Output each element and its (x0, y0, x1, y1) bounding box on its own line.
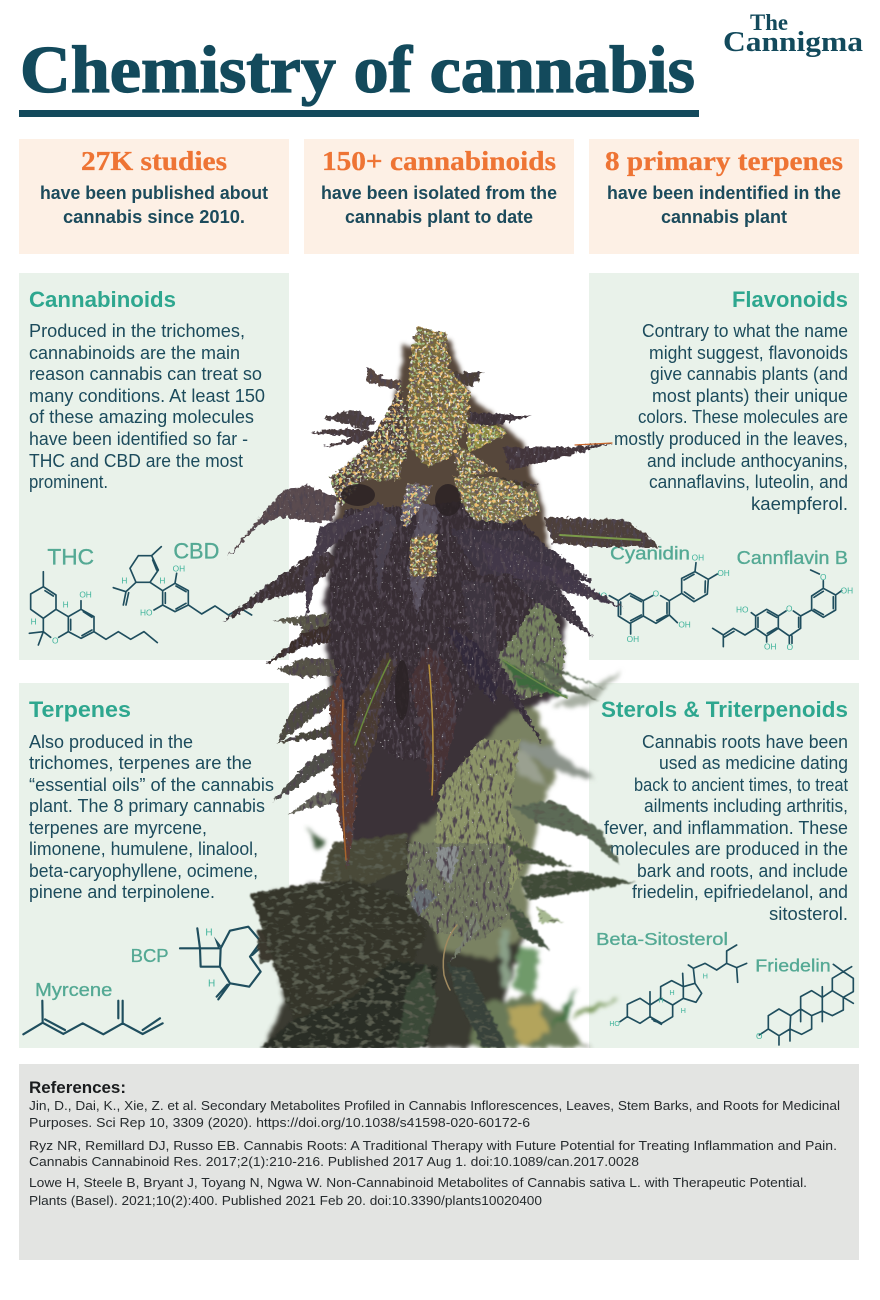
stat card: 27K studies: 27K studies (81, 146, 227, 176)
molecules: THC and CBD: HO (140, 607, 153, 617)
molecules: cyanidin and cannflavin B: OH (717, 568, 730, 578)
logo: The Cannigma: The (750, 10, 788, 35)
molecules: cyanidin and cannflavin B: HO (595, 590, 608, 600)
references list: Jin, D., Dai, K., Xie, Z. et al. Secondary Metabolites Profiled in Cannabis Inflorescences, Leaves, Stem Barks, and Roots for Medicinal (29, 1098, 840, 1113)
molecules: THC and CBD: THC (47, 544, 94, 569)
molecules: beta-sitosterol and friedelin: H (681, 1006, 686, 1015)
molecules: myrcene and BCP: H (205, 927, 213, 938)
text block: sterols: ailments including arthritis, (644, 796, 848, 816)
references list (29, 1098, 840, 1208)
text block: sterols: back to ancient times, to treat (634, 775, 848, 795)
logo: The Cannigma (723, 10, 863, 58)
text block: sterols: sitosterol. (769, 904, 848, 924)
text block: cannabinoids: Produced in the trichomes, (29, 321, 245, 341)
text block: terpenes: terpenes are myrcene, (29, 818, 207, 838)
stat card: 8 primary terpenes: 8 primary terpenes (605, 146, 843, 176)
text block: flavonoids: kaempferol. (751, 494, 848, 514)
image: cannabis flower (222, 327, 660, 1048)
text block: flavonoids: give cannabis plants (and (650, 364, 848, 384)
title: Chemistry of cannabis (20, 33, 695, 107)
stat card: 8 primary terpenes (589, 139, 859, 254)
molecules: THC and CBD: OH (173, 564, 185, 574)
text block: flavonoids: mostly produced in the leaves, (614, 429, 848, 449)
panel: cannabinoids (19, 273, 289, 660)
dark lower leaves (250, 657, 635, 1048)
panel: flavonoids (589, 273, 859, 660)
molecules: THC and CBD: H (63, 599, 69, 609)
text block: flavonoids: and include anthocyanins, (647, 451, 848, 471)
text block: cannabinoids: reason cannabis can treat so (29, 364, 262, 384)
text block: flavonoids: Contrary to what the name (642, 321, 848, 341)
purple side leaves (222, 367, 660, 870)
molecules: beta-sitosterol and friedelin: H (703, 971, 708, 980)
molecules: cyanidin and cannflavin B: Cannflavin B (737, 547, 848, 568)
heading: flavonoids: Flavonoids (732, 287, 848, 312)
stat card: 8 primary terpenes: have been indentified in the (607, 183, 841, 203)
molecules: cyanidin and cannflavin B: OH (841, 585, 853, 595)
text block: sterols: used as medicine dating (659, 753, 848, 773)
molecules: myrcene and BCP: BCP (131, 945, 169, 966)
text block: flavonoids: colors. These molecules are (638, 407, 848, 427)
leaf midribs and pistils (342, 443, 640, 990)
text block: sterols: fever, and inflammation. These (604, 818, 848, 838)
molecules: beta-sitosterol and friedelin: O (756, 1031, 763, 1041)
heading: terpenes: Terpenes (29, 697, 131, 722)
text block: cannabinoids: many conditions. At least 150 (29, 386, 265, 406)
stat card: 150+ cannabinoids (304, 139, 574, 254)
title underline (19, 110, 699, 117)
molecules: beta-sitosterol and friedelin: HO (609, 1021, 620, 1028)
text block: cannabinoids (29, 321, 265, 492)
text block: sterols (604, 732, 848, 924)
text block: flavonoids (614, 321, 848, 514)
molecules: beta-sitosterol and friedelin: H (658, 996, 664, 1005)
text block: terpenes: plant. The 8 primary cannabis (29, 796, 265, 816)
text block: cannabinoids: of these amazing molecules (29, 407, 254, 427)
stat card: 27K studies: cannabis since 2010. (63, 207, 245, 227)
molecules: THC and CBD: H (31, 616, 37, 626)
text block: sterols: Cannabis roots have been (642, 732, 848, 752)
references list: Ryz NR, Remillard DJ, Russo EB. Cannabis Roots: A Traditional Therapy with Future Potential for Treating Inflammation and Pain. (29, 1138, 837, 1153)
references list: Plants (Basel). 2021;10(2):400. Published 2021 Feb 20. doi:10.3390/plants10020400 (29, 1193, 542, 1208)
molecules: cyanidin and cannflavin B: O (653, 589, 660, 599)
stat card: 8 primary terpenes: cannabis plant (661, 207, 787, 227)
references panel (19, 1064, 859, 1260)
text block: terpenes: “essential oils” of the cannabis (29, 775, 274, 795)
text block: terpenes: limonene, humulene, linalool, (29, 839, 258, 859)
molecules: THC and CBD: O (52, 636, 59, 646)
molecules: THC and CBD: CBD (173, 538, 219, 563)
text block: terpenes (29, 732, 274, 902)
text block: terpenes: beta-caryophyllene, ocimene, (29, 861, 258, 881)
stat card: 27K studies (19, 139, 289, 254)
molecules: cyanidin and cannflavin B: HO (736, 604, 749, 614)
molecules: THC and CBD: OH (79, 590, 92, 600)
molecules: THC and CBD: H (159, 576, 165, 586)
molecules: beta-sitosterol and friedelin: Beta-Sitosterol (596, 929, 728, 949)
panel: sterols and triterpenoids (589, 683, 859, 1048)
references list: Purposes. Sci Rep 10, 3309 (2020). https://doi.org/10.1038/s41598-020-60172-6 (29, 1115, 530, 1130)
text block: cannabinoids: cannabinoids are the main (29, 343, 240, 363)
molecules: cyanidin and cannflavin B: OH (692, 553, 704, 563)
text block: cannabinoids: have been identified so far - (29, 429, 248, 449)
text block: sterols: bark and roots, and include (637, 861, 848, 881)
stat card: 27K studies: have been published about (40, 183, 268, 203)
text block: sterols: molecules are produced in the (610, 839, 848, 859)
logo: The Cannigma: Cannigma (723, 27, 863, 58)
molecules: myrcene and BCP: Myrcene (35, 979, 112, 1000)
molecules: beta-sitosterol and friedelin (596, 929, 853, 1045)
molecules: myrcene and BCP: H (208, 979, 215, 990)
stat card: 150+ cannabinoids: 150+ cannabinoids (322, 146, 556, 176)
text block: terpenes: trichomes, terpenes are the (29, 753, 252, 773)
molecules: THC and CBD (29, 538, 252, 646)
text block: terpenes: Also produced in the (29, 732, 193, 752)
references heading: References: (29, 1079, 126, 1097)
stat card: 150+ cannabinoids: have been isolated from the (321, 183, 557, 203)
green flowers with light trichomes (406, 602, 566, 962)
molecules: myrcene and BCP (23, 927, 280, 1034)
molecules: cyanidin and cannflavin B: O (820, 572, 827, 582)
text block: terpenes: pinene and terpinolene. (29, 882, 215, 902)
molecules: cyanidin and cannflavin B: OH (678, 619, 691, 629)
top bud (330, 327, 540, 577)
molecules: THC and CBD: H (121, 575, 127, 585)
text block: flavonoids: cannaflavins, luteolin, and (649, 472, 848, 492)
molecules: cyanidin and cannflavin B (595, 542, 853, 652)
molecules: beta-sitosterol and friedelin: Friedelin (755, 956, 831, 976)
heading: cannabinoids: Cannabinoids (29, 287, 176, 312)
text block: cannabinoids: prominent. (29, 472, 108, 492)
text block: sterols: friedelin, epifriedelanol, and (632, 882, 848, 902)
text block: flavonoids: most plants) their unique (652, 386, 848, 406)
panel: terpenes (19, 683, 289, 1048)
molecules: beta-sitosterol and friedelin: H (669, 988, 675, 997)
molecules: cyanidin and cannflavin B: O (787, 642, 794, 652)
heading: sterols and triterpenoids: Sterols & Triterpenoids (601, 697, 848, 722)
molecules: cyanidin and cannflavin B: OH (627, 634, 639, 644)
text block: flavonoids: might suggest, flavonoids (649, 343, 848, 363)
molecules: cyanidin and cannflavin B: OH (764, 642, 776, 652)
references list: Lowe H, Steele B, Bryant J, Toyang N, Ngwa W. Non-Cannabinoid Metabolites of Cannabis sativa L. with Therapeutic Potential. (29, 1175, 807, 1190)
text block: cannabinoids: THC and CBD are the most (29, 451, 243, 471)
references list: Cannabis Cannabinoid Res. 2017;2(1):210-216. Published 2017 Aug 1. doi:10.1089/can.2017.0028 (29, 1154, 639, 1169)
molecules: cyanidin and cannflavin B: O (786, 604, 793, 614)
dark hollows (341, 484, 461, 720)
stat card: 150+ cannabinoids: cannabis plant to date (345, 207, 533, 227)
plant base masses (262, 340, 623, 1048)
molecules: cyanidin and cannflavin B: Cyanidin (610, 542, 690, 563)
